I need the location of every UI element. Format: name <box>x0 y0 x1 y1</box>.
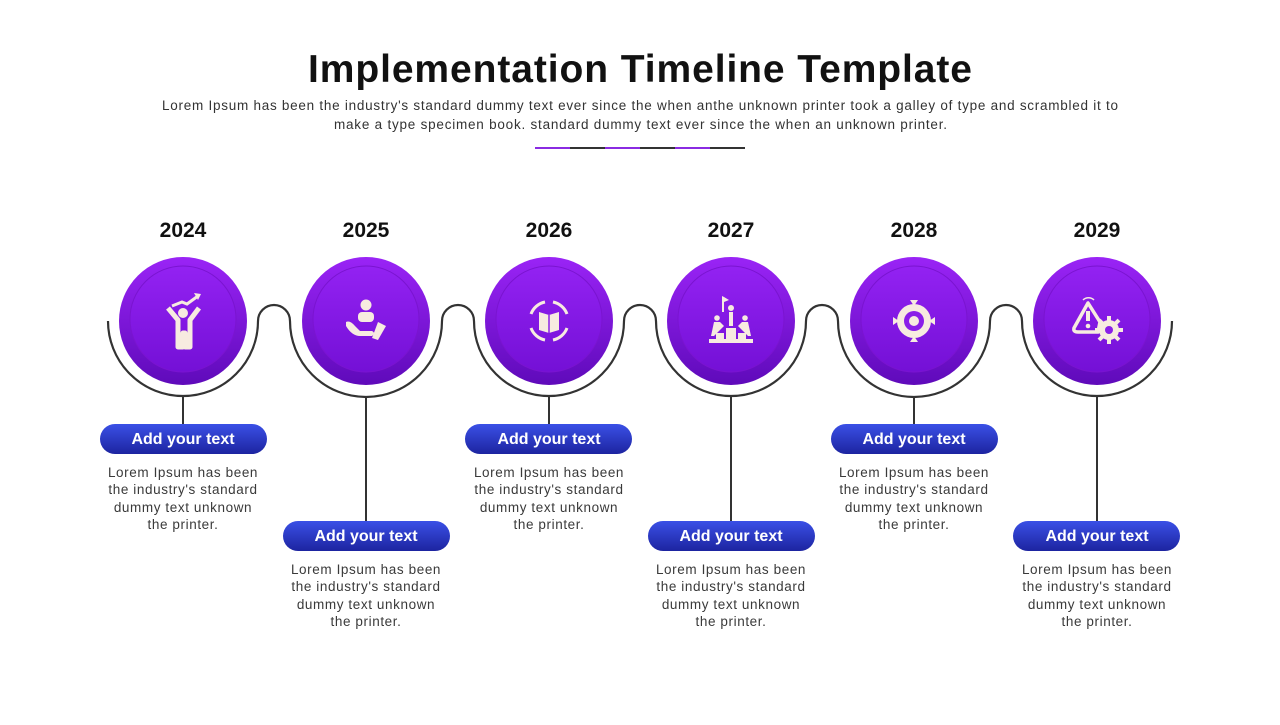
years: 2027 <box>708 219 754 242</box>
descriptions: dummy text unknown <box>1028 597 1166 612</box>
descriptions: the industry's standard <box>474 482 624 497</box>
descriptions: the printer. <box>514 517 584 532</box>
subtitle <box>162 98 1118 132</box>
years: 2024 <box>160 219 207 242</box>
descriptions: dummy text unknown <box>297 597 435 612</box>
circles <box>119 257 1161 385</box>
descriptions: Lorem Ipsum has been <box>474 465 624 480</box>
icon: book with cycle arrows <box>531 302 567 340</box>
pill labels <box>131 431 1149 545</box>
years: 2028 <box>891 219 938 242</box>
descriptions: the industry's standard <box>291 579 441 594</box>
pill labels: Add your text <box>314 528 418 545</box>
descriptions: Lorem Ipsum has been <box>291 562 441 577</box>
years <box>160 219 1120 242</box>
descriptions: the printer. <box>696 614 766 629</box>
subtitle: make a type specimen book. standard dummy text ever since the when an unknown printer. <box>334 117 947 132</box>
descriptions: the printer. <box>330 614 402 629</box>
icon: warning with gear <box>1074 298 1123 344</box>
icon: person with growth arrow <box>168 293 201 347</box>
descriptions: Lorem Ipsum has been <box>1022 562 1172 577</box>
descriptions: Lorem Ipsum has been <box>108 465 258 480</box>
descriptions: Lorem Ipsum has been <box>839 465 989 480</box>
descriptions: the industry's standard <box>1022 579 1172 594</box>
descriptions <box>108 465 1172 629</box>
descriptions: dummy text unknown <box>480 500 618 515</box>
years: 2025 <box>343 219 390 242</box>
descriptions: the printer. <box>878 517 950 532</box>
descriptions: the printer. <box>1062 614 1132 629</box>
subtitle: Lorem Ipsum has been the industry's standard dummy text ever since the when anthe unknown printer took a galley of type and scrambled it to <box>162 98 1118 113</box>
pills <box>100 424 1180 551</box>
descriptions: the industry's standard <box>839 482 989 497</box>
descriptions: dummy text unknown <box>845 500 983 515</box>
connectors <box>183 396 1097 522</box>
descriptions: dummy text unknown <box>662 597 800 612</box>
icon: hand holding person <box>346 300 386 340</box>
wavy timeline path <box>108 305 1172 397</box>
icon: target crosshair <box>893 300 935 342</box>
icon: team on podium with flag <box>709 296 753 343</box>
pill labels: Add your text <box>1045 528 1149 545</box>
pill labels: Add your text <box>497 431 601 448</box>
descriptions: dummy text unknown <box>114 500 252 515</box>
descriptions: the printer. <box>148 517 218 532</box>
pill labels: Add your text <box>131 431 235 448</box>
descriptions: the industry's standard <box>108 482 258 497</box>
years: 2029 <box>1074 219 1120 242</box>
descriptions: Lorem Ipsum has been <box>656 562 806 577</box>
years: 2026 <box>526 219 572 242</box>
title: Implementation Timeline Template <box>308 48 972 91</box>
pill labels: Add your text <box>862 431 966 448</box>
descriptions: the industry's standard <box>656 579 806 594</box>
pill labels: Add your text <box>679 528 783 545</box>
divider <box>535 147 745 149</box>
